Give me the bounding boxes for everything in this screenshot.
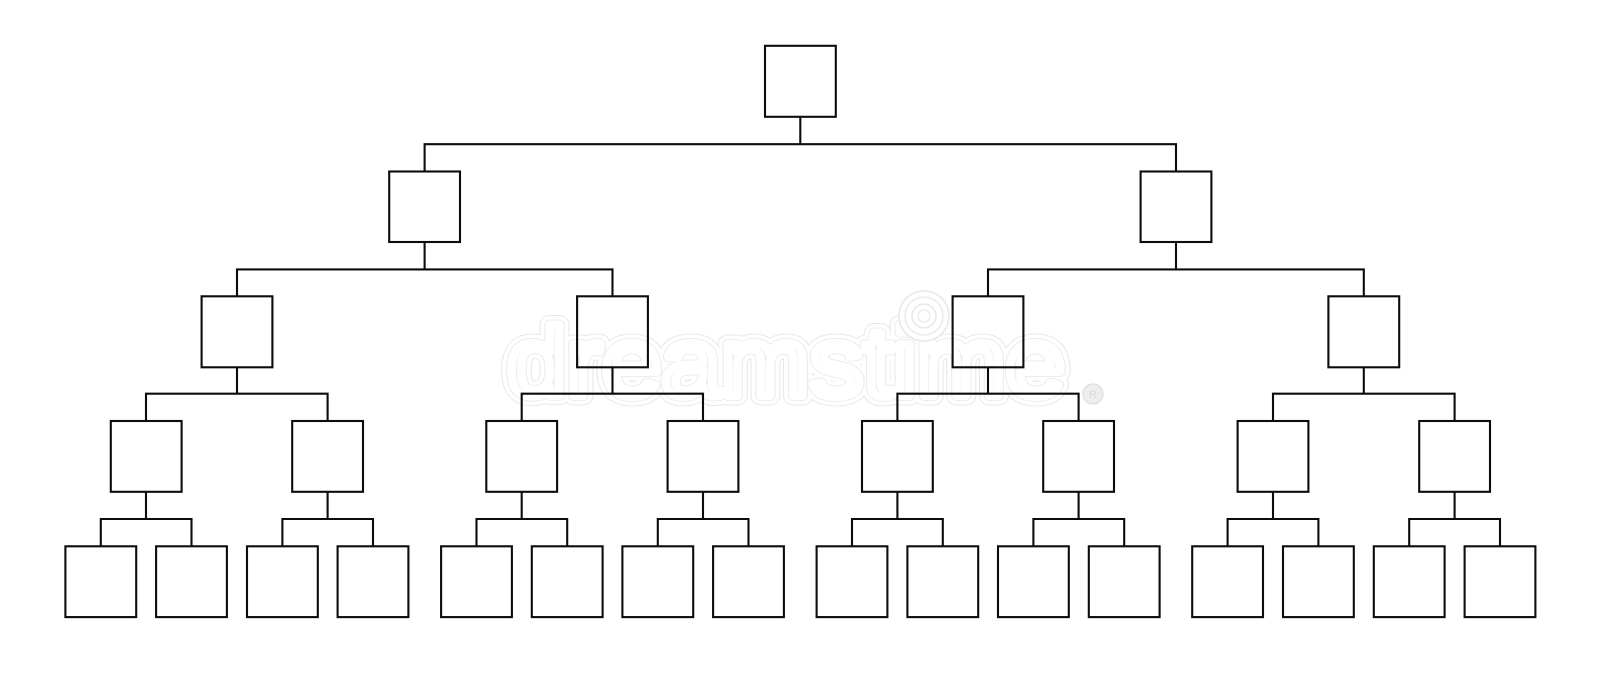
connectors: level 3 to level 4 (101, 492, 1500, 546)
watermark: dreamstime: dreamstime (507, 307, 1065, 417)
watermark: dreamstime: R (1089, 389, 1097, 401)
tree diagram (65, 46, 1535, 617)
watermark: dreamstime: dreamstime (507, 307, 1065, 417)
watermark: dreamstime: dreamstime (507, 307, 1065, 417)
level 2 boxes (202, 296, 1399, 367)
connectors: root to level 1 (425, 116, 1176, 172)
level 4 boxes (65, 546, 1535, 617)
level 1 boxes (389, 172, 1211, 242)
connectors: level 2 to level 3 (146, 367, 1455, 421)
connectors: level 1 to level 2 (237, 242, 1364, 296)
watermark: dreamstime: dreamstime (507, 307, 1065, 417)
root box (765, 46, 836, 117)
level 3 boxes (111, 421, 1490, 492)
